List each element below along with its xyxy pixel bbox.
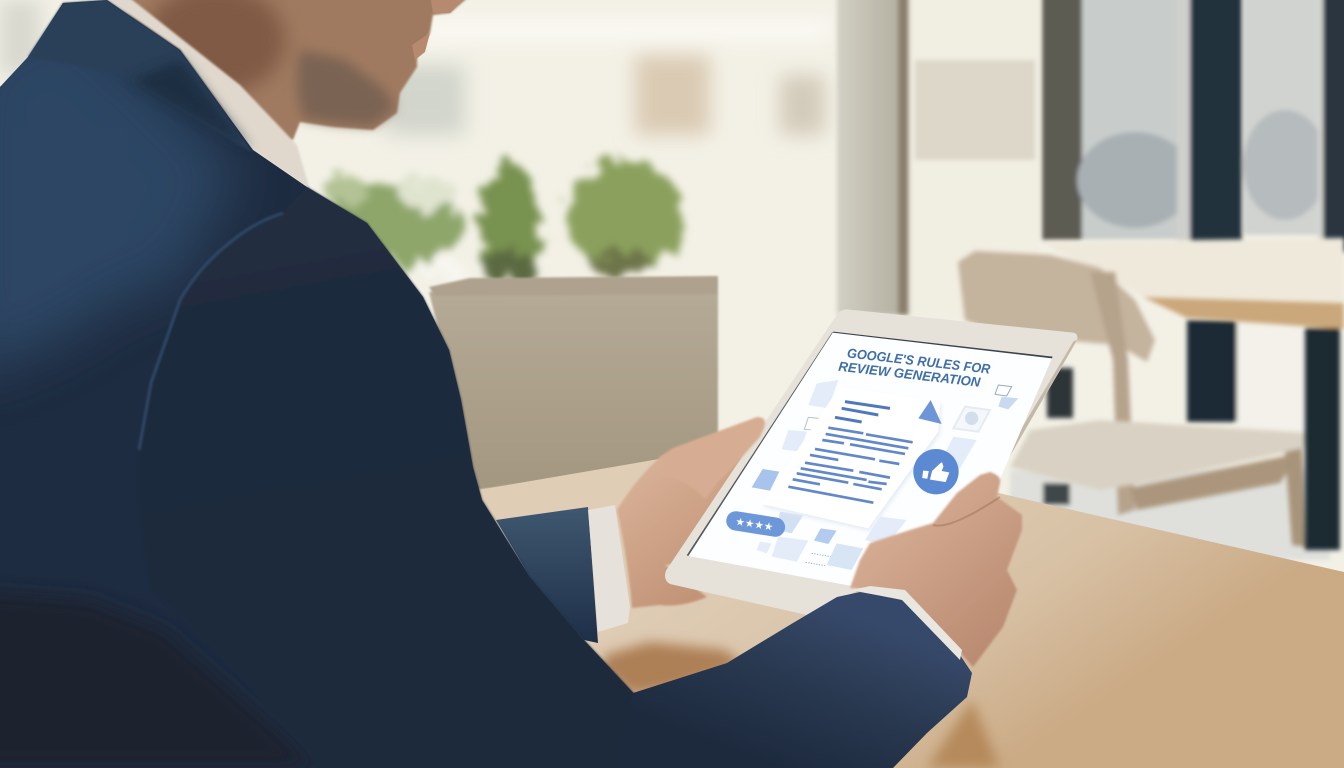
document text lines <box>788 402 913 503</box>
beard <box>297 50 395 126</box>
tablet body <box>665 309 1077 615</box>
blue tile bottom <box>814 528 837 544</box>
main wooden table <box>478 440 1344 768</box>
sleeve seam <box>139 213 283 450</box>
left hand palm <box>617 440 770 608</box>
planter box <box>429 276 718 490</box>
triangle icon <box>918 400 942 424</box>
jacket <box>0 0 640 768</box>
left thumb <box>660 417 765 500</box>
window frame and posts <box>837 0 1344 320</box>
screen top edge <box>833 332 1053 358</box>
neck shadow <box>145 0 285 95</box>
dotted lines <box>806 553 831 566</box>
small square <box>804 417 819 430</box>
wooden chair <box>958 251 1312 547</box>
thumbs-up badge <box>913 449 959 494</box>
left sleeve <box>496 507 598 643</box>
blue tile left <box>752 469 779 491</box>
tablet title: GOOGLE'S RULES FOR <box>846 345 991 377</box>
nose and lip <box>412 0 468 60</box>
target icon <box>953 407 990 432</box>
tablet screen <box>688 332 1053 603</box>
square outline icon <box>995 385 1012 396</box>
screen left edge <box>687 332 833 556</box>
dark upper sleeve <box>138 187 640 768</box>
rating pill: ★★★★ <box>734 515 774 534</box>
tablet <box>665 309 1077 615</box>
lit back panel <box>0 0 320 768</box>
man's head and neck <box>110 0 470 140</box>
table shadow under arm <box>600 642 1000 768</box>
right shirt cuff <box>852 586 962 660</box>
background table top and lower windows <box>1010 238 1344 560</box>
plants <box>323 160 683 287</box>
tablet side edge <box>996 339 1077 473</box>
decorative tiles <box>757 380 1018 570</box>
collar shadow <box>130 60 250 150</box>
shirt collar <box>105 0 310 190</box>
thumb shading <box>933 497 1000 526</box>
rating pill <box>725 510 786 538</box>
right forearm sleeve <box>610 592 972 768</box>
document card <box>762 386 941 531</box>
jacket collar <box>28 0 253 153</box>
right hand <box>850 472 1022 667</box>
jacket body <box>0 0 640 768</box>
tablet title: REVIEW GENERATION <box>838 359 981 390</box>
left shirt cuff <box>588 505 630 632</box>
tablet title <box>838 345 991 390</box>
background table edge and post <box>1143 297 1344 550</box>
